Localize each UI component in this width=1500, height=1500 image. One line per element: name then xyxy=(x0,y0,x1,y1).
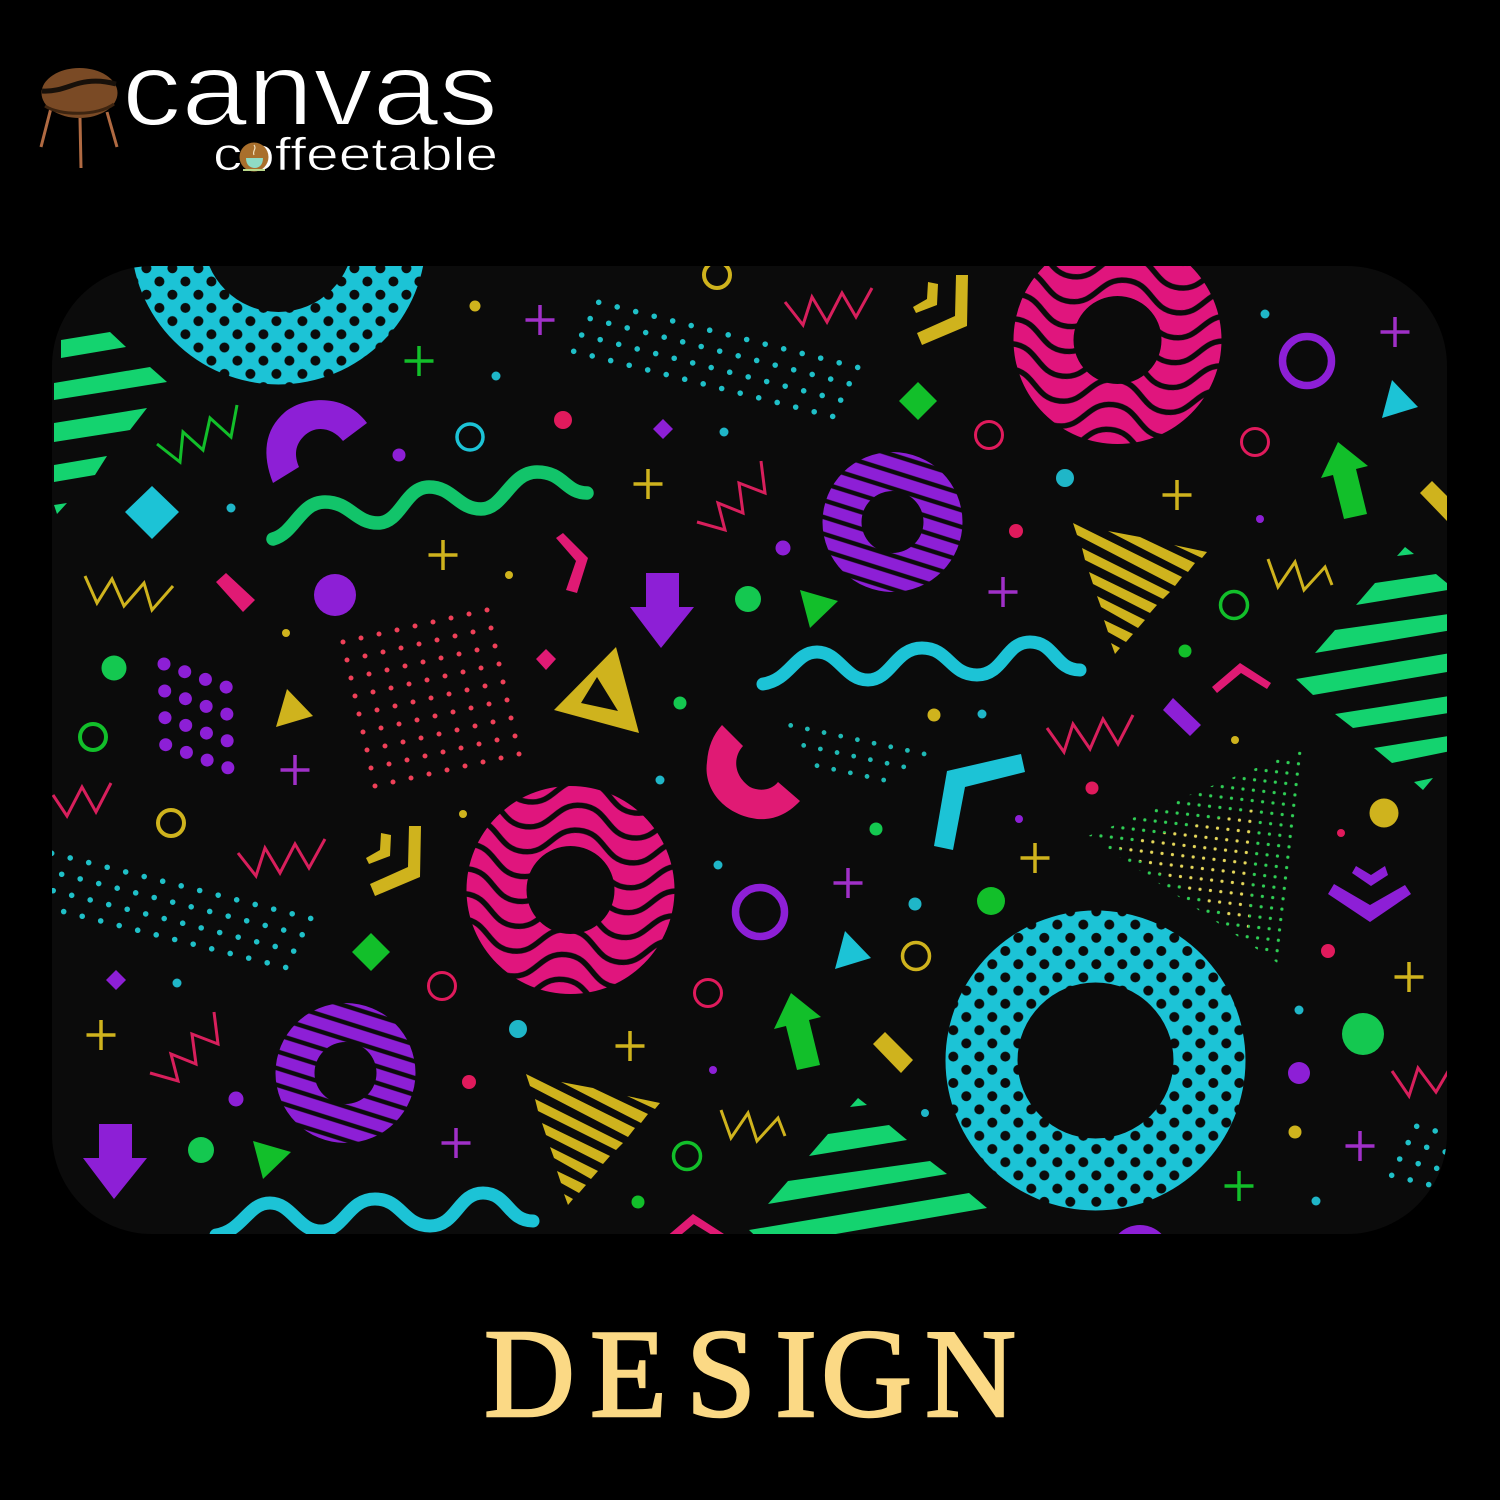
purple plus 2 xyxy=(1380,317,1410,347)
red dot grid xyxy=(343,610,519,786)
cyan dot left xyxy=(226,504,236,512)
yellow dot lower xyxy=(459,810,467,818)
cyan dot near ring xyxy=(908,898,922,910)
green plus top xyxy=(404,346,434,376)
green circle center xyxy=(977,887,1005,915)
purple chevrons xyxy=(1328,866,1411,922)
cyan chevron xyxy=(934,754,1025,850)
purple bar xyxy=(1163,698,1201,736)
yellow chevrons, lower xyxy=(366,826,421,896)
cyan dot band, corner xyxy=(1388,1124,1446,1188)
green circle left xyxy=(102,656,126,680)
purple dot xyxy=(776,540,790,556)
purple plus right xyxy=(1346,1131,1374,1161)
tiny purple dot, lower xyxy=(709,1066,717,1074)
green plus right xyxy=(1224,1171,1254,1201)
purple ring xyxy=(1282,336,1332,386)
purple striped donut xyxy=(822,452,962,592)
cyan dot, lower xyxy=(509,1020,527,1038)
purple plus top xyxy=(526,305,554,335)
cyan wave, lower xyxy=(216,1193,533,1235)
cyan dot band, left xyxy=(27,853,311,968)
yellow dot top xyxy=(470,300,480,312)
cyan triangle, lower xyxy=(835,931,871,969)
green ring left xyxy=(80,724,106,750)
pink zigzag center xyxy=(1047,715,1133,752)
purple plus 2, lower xyxy=(834,868,862,898)
pink bar xyxy=(216,573,255,612)
yellow striped triangle xyxy=(1073,523,1207,654)
pink dot top xyxy=(554,411,572,429)
yellow outline triangle xyxy=(554,647,639,733)
logo xyxy=(41,32,498,180)
cyan dot mid xyxy=(656,776,664,784)
logo word: canvas: canvas xyxy=(122,32,498,148)
arrow: purple down xyxy=(630,573,694,648)
green wave xyxy=(273,472,587,539)
arrow: green up xyxy=(1321,442,1368,519)
mat surface xyxy=(52,266,1447,1234)
red small dot right xyxy=(1337,829,1345,837)
yellow bar, lower xyxy=(873,1032,913,1073)
yellow ring top xyxy=(704,262,730,288)
purple dot mid xyxy=(392,448,406,462)
yellow plus 2, lower xyxy=(616,1031,644,1061)
purple arc xyxy=(266,400,367,483)
green diamond, lower xyxy=(352,933,390,971)
green dot, lower xyxy=(188,1137,214,1163)
pink arc xyxy=(707,725,800,819)
green dot center xyxy=(674,696,686,710)
yellow dot mid xyxy=(928,708,940,722)
yellow plus right xyxy=(1394,962,1424,992)
logo word: coffeetable: coffeetable xyxy=(213,128,498,180)
green triangle xyxy=(800,590,838,628)
red ring 2 xyxy=(1242,428,1268,456)
purple ring, lower xyxy=(736,888,784,936)
purple half circle bottom xyxy=(1110,1225,1170,1285)
pink dot center xyxy=(1086,782,1098,794)
cyan dot 2, lower xyxy=(714,860,722,870)
pink zigzag left xyxy=(53,783,111,816)
cyan diamond xyxy=(125,486,179,539)
cyan small dot, lower xyxy=(172,978,182,988)
cyan small dot xyxy=(720,428,728,436)
purple dot, lower xyxy=(228,1092,244,1106)
pink dot, lower xyxy=(462,1075,476,1089)
purple plus, lower xyxy=(442,1128,470,1158)
pink zigzag xyxy=(785,288,872,325)
pink dot xyxy=(1009,524,1023,538)
green small dot, lower xyxy=(632,1196,644,1208)
yellow bar xyxy=(1420,481,1460,522)
icon: coffee bean table xyxy=(41,68,118,168)
big dotted cyan ring xyxy=(946,910,1246,1210)
purple dot right xyxy=(1288,1062,1310,1084)
green ring, lower xyxy=(674,1142,700,1170)
yellow dot right xyxy=(1288,1126,1302,1138)
green zigzag xyxy=(157,405,237,462)
yellow small dot left xyxy=(282,629,290,637)
green triangle, lower xyxy=(253,1141,291,1179)
pink zigzag, lower xyxy=(238,839,325,876)
cyan triangle xyxy=(1382,380,1418,418)
purple dot grid xyxy=(164,664,228,768)
green diamond xyxy=(899,382,937,420)
cyan wave xyxy=(763,642,1080,684)
cyan dot top xyxy=(492,372,500,380)
cyan dot right lower xyxy=(1294,1006,1304,1014)
red ring, lower xyxy=(428,972,456,1000)
cyan dot right xyxy=(978,710,986,718)
purple striped donut, lower xyxy=(276,1003,416,1143)
cyan dot bottom xyxy=(921,1109,929,1117)
yellow small dot xyxy=(505,571,513,579)
purple small diamond, lower xyxy=(106,970,126,990)
small cyan dot cluster xyxy=(791,725,924,780)
green striped shape, left xyxy=(54,332,167,514)
red ring xyxy=(976,422,1002,448)
yellow plus mid xyxy=(428,540,458,570)
green circle right xyxy=(1342,1013,1384,1055)
tiny purple dot center xyxy=(1015,815,1023,823)
yellow plus center xyxy=(1020,843,1050,873)
green dot xyxy=(735,586,761,612)
red ring 2, lower xyxy=(694,980,722,1006)
cyan dot xyxy=(1056,469,1074,487)
pink small diamond xyxy=(536,649,556,670)
yellow tiny dot xyxy=(1231,736,1239,744)
pink chevron xyxy=(1212,663,1271,693)
green striped triangle, right xyxy=(1296,547,1500,790)
cyan dot corner xyxy=(1312,1196,1320,1206)
yellow plus xyxy=(634,469,662,499)
yellow ring left xyxy=(158,810,184,836)
purple plus left xyxy=(280,755,310,785)
red dot right xyxy=(1321,944,1335,958)
green ring xyxy=(1220,592,1248,618)
yellow zigzag, lower xyxy=(721,1110,785,1141)
yellow striped triangle, lower xyxy=(526,1074,660,1205)
panel: patterned mat xyxy=(52,266,1447,1234)
arrow: purple down, lower xyxy=(83,1124,147,1199)
green dot triangle xyxy=(1088,749,1303,964)
cyan dot band xyxy=(574,302,858,416)
green dot mid xyxy=(870,822,882,836)
pink chevron mid xyxy=(556,533,588,593)
green striped triangle, bottom xyxy=(749,1098,987,1234)
pink rising zigzag, lower xyxy=(150,1012,218,1081)
pink rising zigzag xyxy=(697,461,765,530)
purple circle xyxy=(314,574,356,616)
yellow ring center xyxy=(902,942,930,970)
yellow chevrons xyxy=(913,275,968,345)
pink wave donut, lower xyxy=(466,786,674,994)
purple small diamond xyxy=(653,419,673,439)
tiny purple dot xyxy=(1256,515,1264,523)
purple plus xyxy=(988,577,1018,607)
pink zigzag right xyxy=(1392,1063,1453,1096)
cyan ring xyxy=(457,424,483,450)
icon: coffee cup xyxy=(240,142,268,172)
pink chevron, lower xyxy=(665,1214,724,1244)
yellow plus 2 xyxy=(1162,480,1192,510)
yellow zigzag xyxy=(1268,559,1332,590)
green small dot xyxy=(1178,644,1192,658)
arrow: green up, lower xyxy=(774,993,821,1070)
yellow circle right xyxy=(1370,798,1398,828)
yellow small triangle xyxy=(276,689,313,727)
heading: DESIGN: DESIGN xyxy=(484,1305,1016,1444)
cyan dot 2 xyxy=(1260,310,1270,318)
pink wave donut, top xyxy=(1014,236,1222,444)
yellow plus, lower xyxy=(86,1020,116,1050)
dotted cyan ring, top xyxy=(134,266,424,384)
yellow zigzag left xyxy=(85,576,173,610)
